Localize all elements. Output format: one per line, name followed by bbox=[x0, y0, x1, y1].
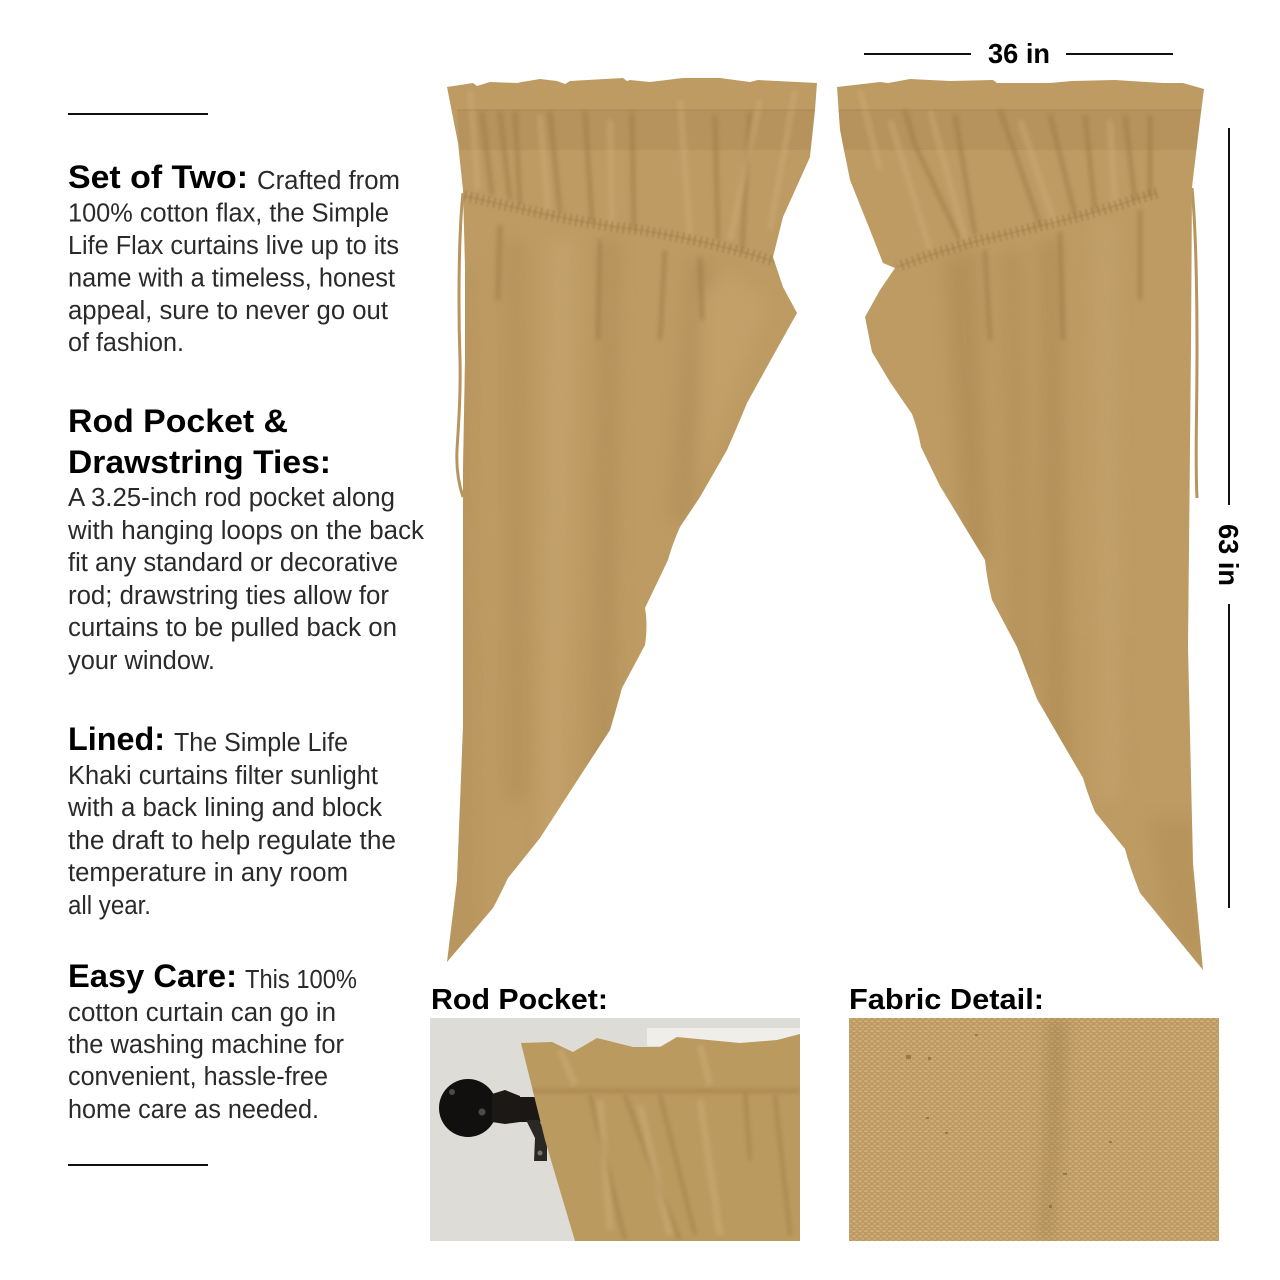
text block: Set of Two: Crafted from bbox=[257, 167, 400, 195]
text block: Easy Care bbox=[68, 958, 357, 1124]
text block: Set of Two bbox=[68, 159, 400, 357]
bottom rule bbox=[68, 1164, 208, 1166]
text block: Lined: temperature in any room bbox=[68, 859, 348, 887]
text block: Lined bbox=[67, 721, 396, 920]
top rule bbox=[68, 113, 208, 115]
gather line bbox=[464, 196, 775, 262]
text block: Rod Pocket and Drawstring Ties: your window. bbox=[68, 647, 215, 675]
text block: Rod Pocket and Drawstring Ties bbox=[67, 403, 424, 675]
text block: Lined: Lined: bbox=[68, 721, 165, 757]
right curtain tie bbox=[1192, 188, 1197, 498]
photo: rod pocket detail bbox=[430, 1018, 805, 1245]
left curtain fabric bbox=[440, 70, 825, 970]
text block: Set of Two: name with a timeless, honest bbox=[68, 264, 395, 292]
text block: Rod Pocket and Drawstring Ties: fit any standard or decorative bbox=[68, 549, 398, 577]
heading: Rod Pocket: Rod Pocket: bbox=[431, 984, 608, 1016]
text block: Set of Two: 100% cotton flax, the Simple bbox=[68, 200, 389, 228]
text block: Lined: The Simple Life bbox=[174, 729, 348, 757]
text block: Set of Two: Life Flax curtains live up to its bbox=[68, 232, 399, 260]
length dimension: 63 in: 63 in bbox=[1213, 524, 1244, 586]
text block: Easy Care: cotton curtain can go in bbox=[68, 999, 336, 1027]
text block: Rod Pocket and Drawstring Ties: Rod Pocket & bbox=[68, 403, 288, 439]
text block: Easy Care: the washing machine for bbox=[68, 1031, 345, 1059]
text block: Lined: all year. bbox=[68, 892, 151, 920]
text block: Easy Care: Easy Care: bbox=[68, 958, 237, 994]
rod pocket band bbox=[458, 110, 815, 137]
gather line bbox=[897, 193, 1157, 267]
text block: Lined: with a back lining and block bbox=[67, 794, 382, 822]
text block: Set of Two: appeal, sure to never go out bbox=[68, 297, 388, 325]
curtain on rod bbox=[515, 1030, 805, 1245]
text block: Rod Pocket and Drawstring Ties: A 3.25-inch rod pocket along bbox=[68, 484, 395, 512]
text block: Easy Care: This 100% bbox=[245, 966, 357, 994]
text block: Lined: the draft to help regulate the bbox=[68, 827, 396, 855]
text block: Rod Pocket and Drawstring Ties: Drawstring Ties: bbox=[68, 444, 331, 480]
left curtain tie bbox=[457, 193, 463, 497]
width dimension: 36 in: 36 in bbox=[988, 38, 1050, 69]
text block: Easy Care: convenient, hassle-free bbox=[68, 1063, 328, 1091]
text block: Rod Pocket and Drawstring Ties: rod; drawstring ties allow for bbox=[68, 582, 390, 610]
text block: Lined: Khaki curtains filter sunlight bbox=[68, 762, 378, 790]
photo: fabric detail bbox=[849, 1018, 1219, 1241]
text block: Rod Pocket and Drawstring Ties: curtains to be pulled back on bbox=[68, 614, 397, 642]
right curtain fabric bbox=[830, 70, 1210, 975]
right curtain panel bbox=[830, 70, 1210, 975]
text block: Easy Care: home care as needed. bbox=[68, 1096, 319, 1124]
left curtain panel bbox=[440, 70, 825, 970]
text block: Set of Two: of fashion. bbox=[68, 329, 184, 357]
rod pocket band bbox=[838, 110, 1201, 150]
text block: Rod Pocket and Drawstring Ties: with hanging loops on the back bbox=[67, 517, 424, 545]
heading: Fabric Detail: Fabric Detail: bbox=[849, 984, 1044, 1016]
text block: Set of Two: Set of Two: bbox=[68, 159, 248, 195]
icon: curtain rod finial bbox=[439, 1079, 547, 1161]
